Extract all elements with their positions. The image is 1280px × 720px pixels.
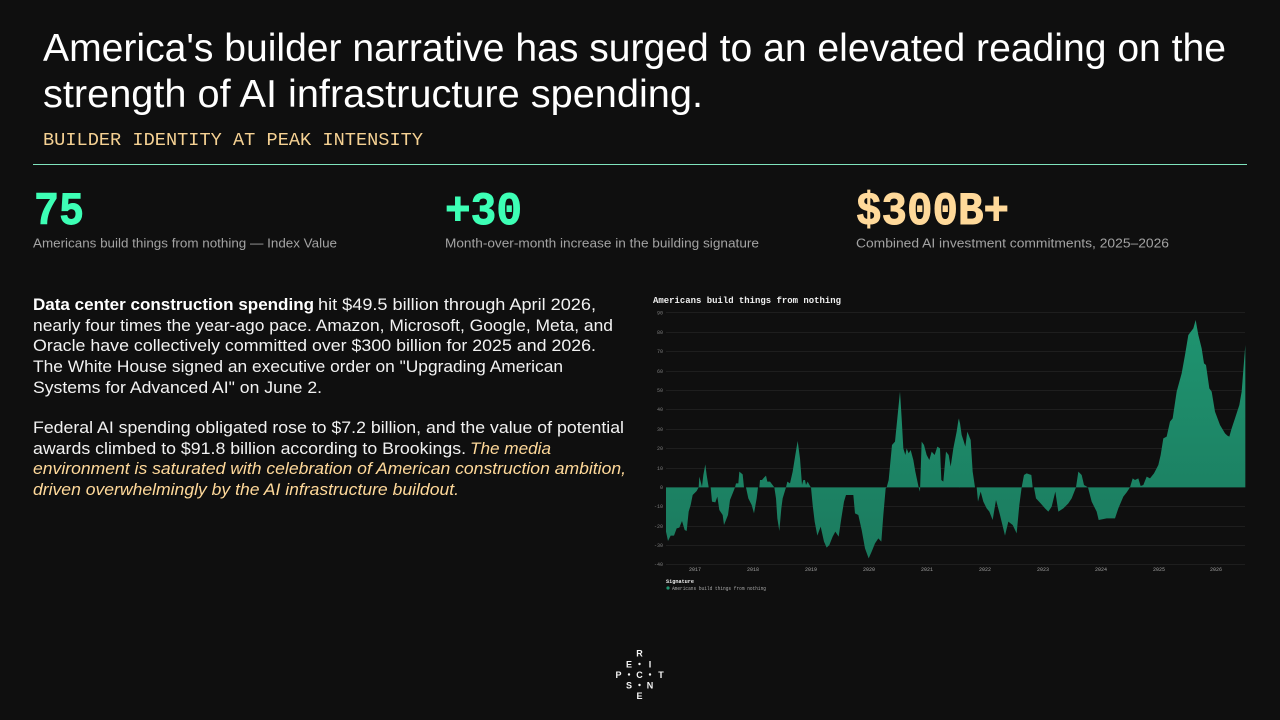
logo: E [626, 660, 632, 670]
logo: I [649, 660, 651, 670]
text block: data center spending: The White House signed an executive order on "Upgrading American [33, 357, 563, 376]
y axis labels: -20 [654, 524, 663, 530]
area series [666, 320, 1245, 558]
subtitle: BUILDER IDENTITY AT PEAK INTENSITY [43, 130, 423, 151]
logo: E [636, 691, 643, 701]
text block: federal AI spending: environment is saturated with celebration of American construction ambition, [33, 459, 626, 478]
title [43, 27, 1226, 116]
legend: Signature [666, 579, 694, 585]
x axis labels: 2023 [1037, 567, 1049, 573]
y axis labels: 30 [657, 427, 663, 433]
logo: P [615, 670, 622, 680]
logo: S [626, 680, 632, 690]
logo: R [636, 648, 643, 658]
x axis labels: 2018 [747, 567, 759, 573]
y axis labels: 80 [657, 330, 663, 336]
stat: monthly increase [445, 186, 759, 250]
text block: federal AI spending: The media [470, 439, 551, 458]
x axis labels: 2021 [921, 567, 933, 573]
chart title: Americans build things from nothing [653, 295, 841, 306]
text block: federal AI spending: driven overwhelmingly by the AI infrastructure buildout. [33, 480, 459, 499]
stat: index value [33, 186, 337, 250]
y axis labels: 50 [657, 388, 663, 394]
logo [615, 648, 664, 701]
y axis labels: 70 [657, 349, 663, 355]
text block: federal AI spending: awards climbed to $91.8 billion according to Brookings. [33, 439, 466, 458]
text block: data center spending: hit $49.5 billion through April 2026, [318, 295, 596, 314]
stat: AI investment: $300B+ [856, 186, 1009, 238]
stat: AI investment: Combined AI investment commitments, 2025–2026 [856, 236, 1169, 250]
stat: monthly increase: Month-over-month increase in the building signature [445, 236, 759, 250]
text block: data center spending: Oracle have collectively committed over $300 billion for 2025 and 2026. [33, 336, 596, 355]
text block: data center spending: Systems for Advanced AI" on June 2. [33, 378, 322, 397]
y axis labels: -10 [654, 504, 663, 510]
x axis labels [689, 567, 1222, 573]
x axis labels: 2026 [1210, 567, 1222, 573]
y axis labels: 0 [660, 485, 663, 491]
logo: N [647, 680, 653, 690]
area chart: Americans build things from nothing [653, 295, 1245, 592]
y axis labels: 60 [657, 369, 663, 375]
x axis labels: 2024 [1095, 567, 1107, 573]
y axis labels: 90 [657, 310, 663, 316]
legend: Americans build things from nothing [672, 586, 766, 592]
x axis labels: 2019 [805, 567, 817, 573]
stat: index value: Americans build things from nothing — Index Value [33, 236, 337, 250]
title: strength of AI infrastructure spending. [43, 73, 703, 116]
logo: T [658, 670, 664, 680]
text block: data center spending: nearly four times the year-ago pace. Amazon, Microsoft, Google, Meta, and [33, 316, 613, 335]
stat: AI investment [856, 186, 1169, 250]
stat: index value: 75 [34, 186, 84, 238]
text block: federal AI spending: Federal AI spending obligated rose to $7.2 billion, and the value of potential [33, 418, 624, 437]
x axis labels: 2025 [1153, 567, 1165, 573]
stat: monthly increase: +30 [445, 186, 522, 238]
x axis labels: 2022 [979, 567, 991, 573]
x axis labels: 2020 [863, 567, 875, 573]
y axis labels [654, 310, 663, 568]
y axis labels: -40 [654, 562, 663, 568]
text block: data center spending: Data center construction spending [33, 295, 314, 314]
x axis labels: 2017 [689, 567, 701, 573]
y axis labels: 40 [657, 407, 663, 413]
logo: C [636, 670, 643, 680]
text block: data center spending [33, 295, 613, 397]
text block: federal AI spending [33, 418, 626, 499]
legend [666, 579, 766, 592]
y axis labels: 20 [657, 446, 663, 452]
y axis labels: -30 [654, 543, 663, 549]
y axis labels: 10 [657, 466, 663, 472]
title: America's builder narrative has surged to an elevated reading on the [43, 27, 1226, 70]
